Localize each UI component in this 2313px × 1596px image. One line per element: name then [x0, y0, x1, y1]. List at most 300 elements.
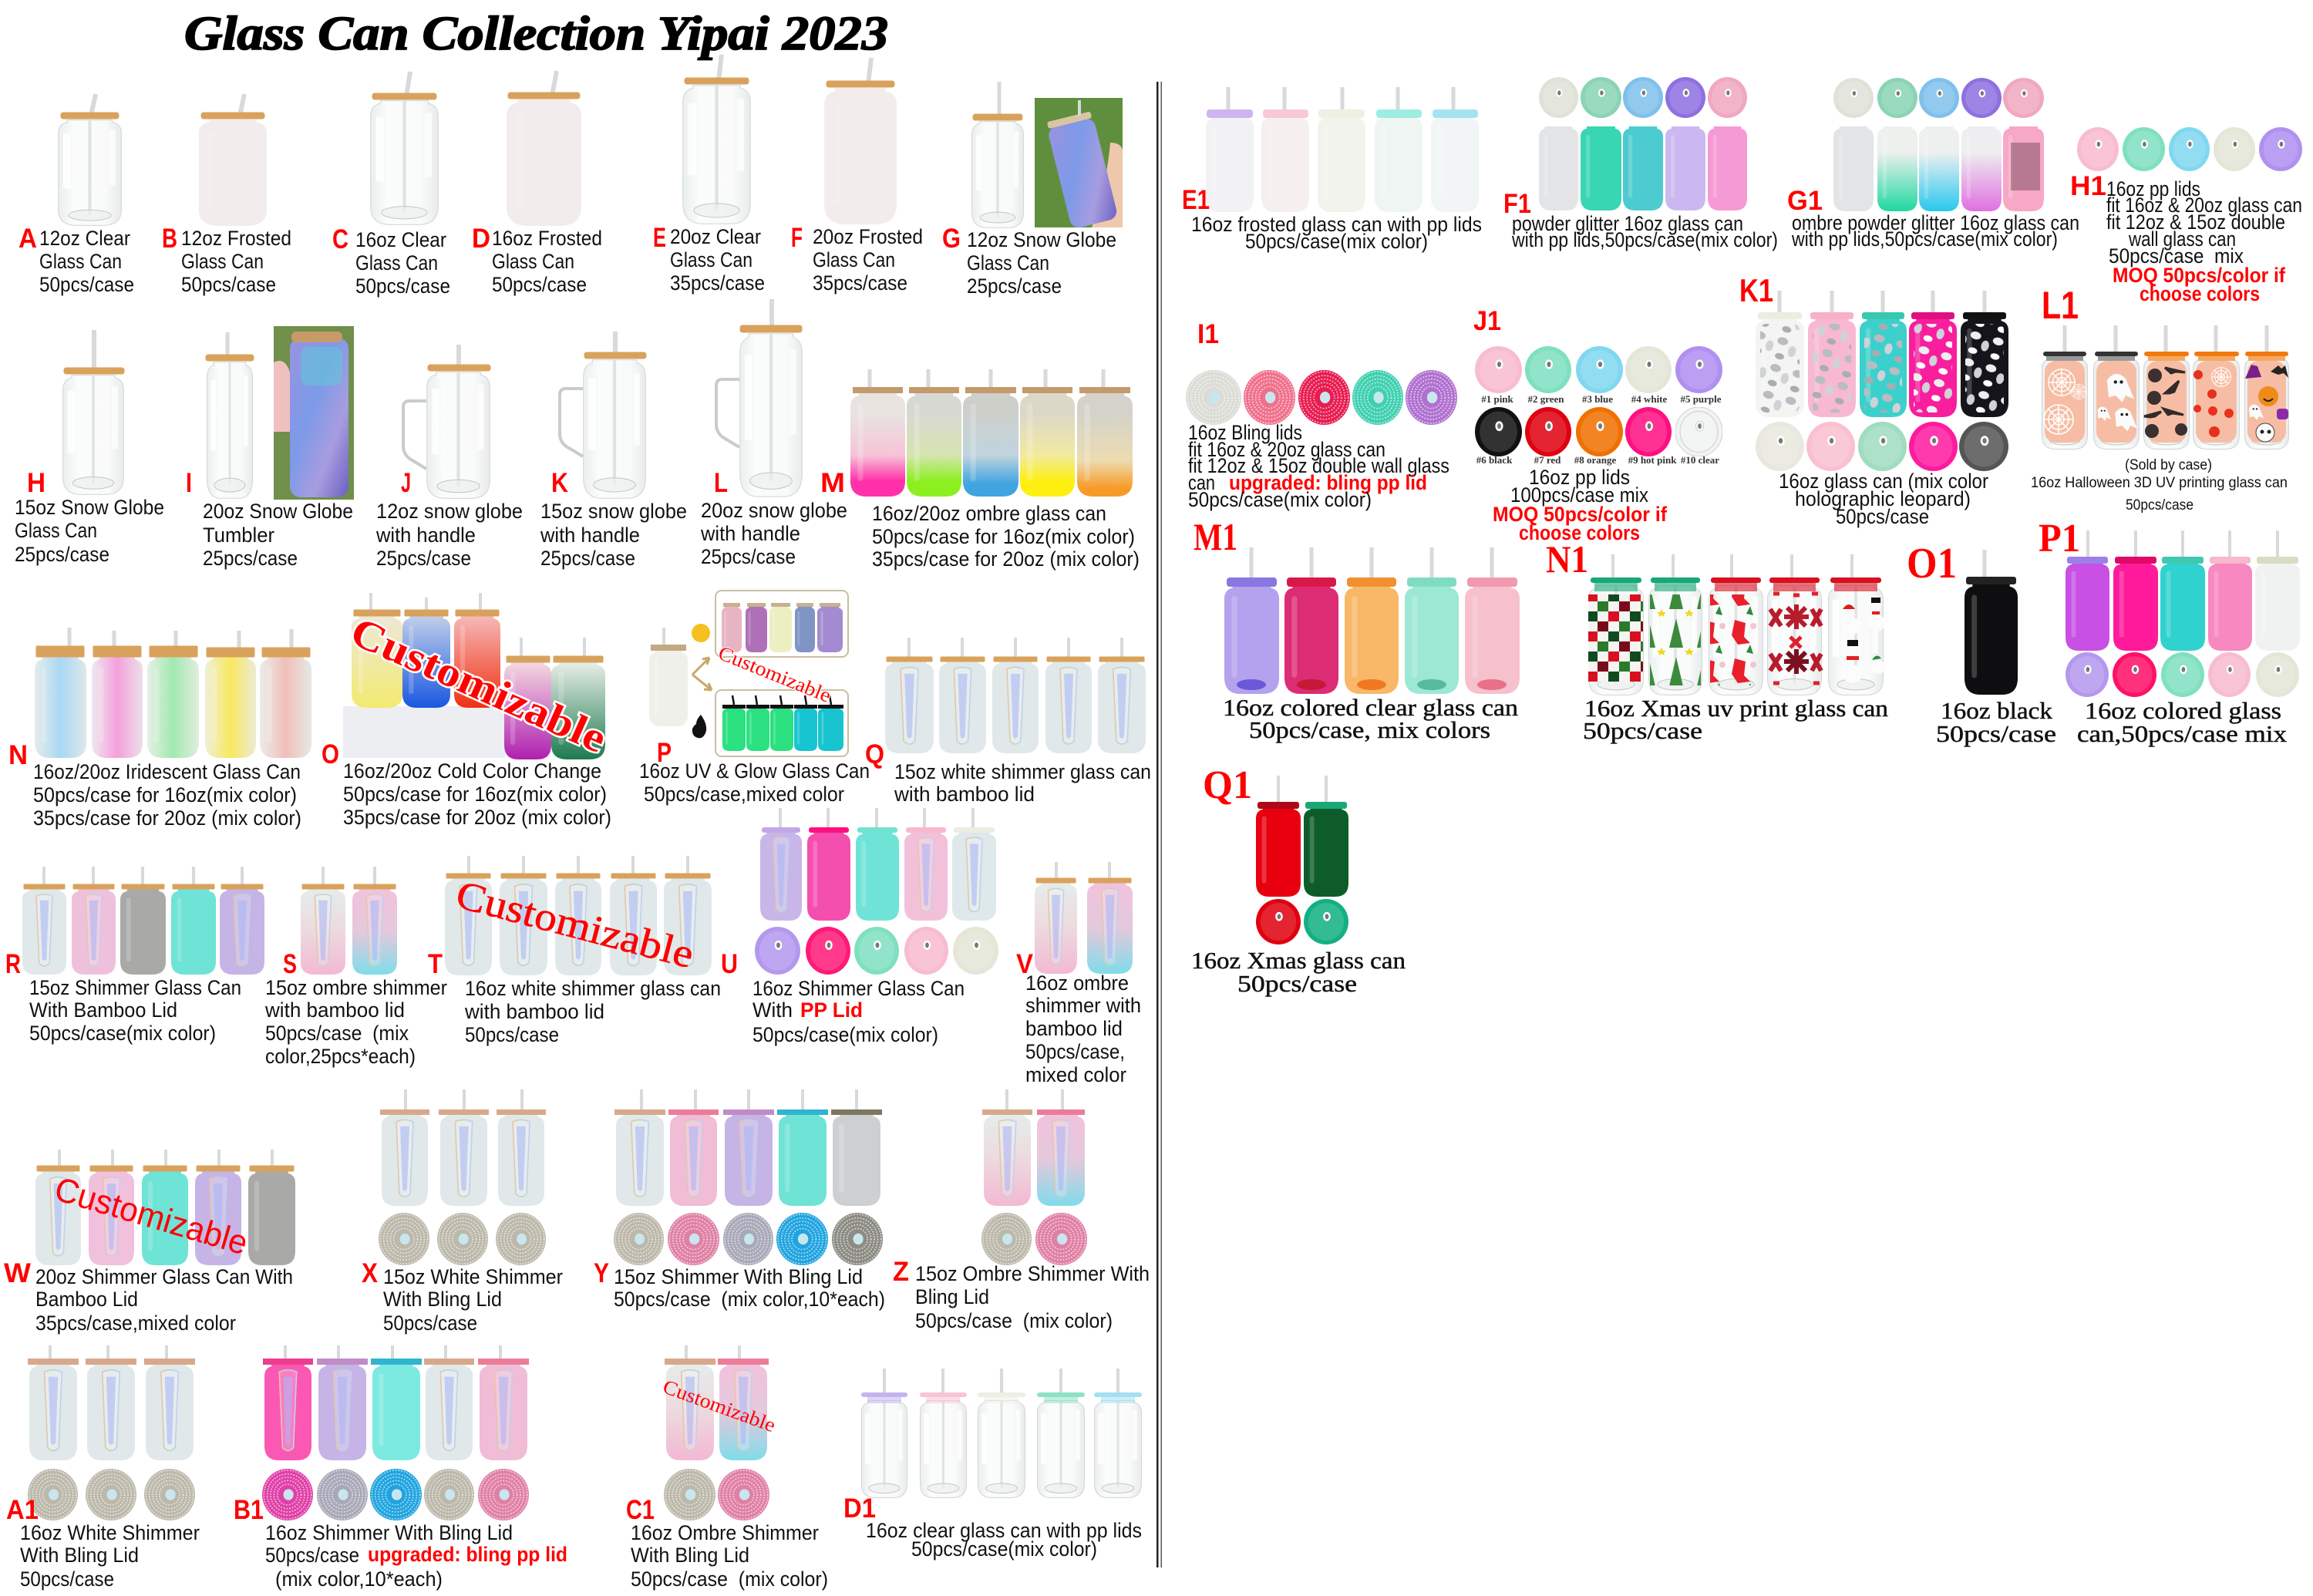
caption D1: 16oz clear glass can with pp lids: [866, 1519, 1142, 1542]
Customizable watermark: Customizable: [452, 873, 699, 977]
caption L1: 50pcs/case: [2126, 497, 2193, 513]
caption J: 25pcs/case: [376, 547, 471, 570]
Customizable watermark: Customizable: [50, 1170, 252, 1262]
panel: P UV and glow: [639, 591, 870, 806]
icon: pp lids row two: [1475, 407, 1722, 456]
Customizable watermark: Customizable: [344, 608, 614, 762]
caption H1: choose colors: [2140, 282, 2260, 305]
icon: two ombre shimmer cans: [301, 867, 397, 975]
icon: three bling lids: [28, 1469, 195, 1520]
photo: color change cans on stand: [343, 593, 605, 759]
panel: G 12oz snow globe: [942, 82, 1123, 298]
letter K: K: [551, 468, 568, 498]
caption T: with bamboo lid: [464, 1000, 604, 1023]
caption G: 25pcs/case: [967, 274, 1062, 298]
caption N: 35pcs/case for 20oz (mix color): [33, 806, 301, 830]
caption B1: 50pcs/case: [265, 1544, 359, 1567]
caption X: [383, 1265, 563, 1335]
caption S: 15oz ombre shimmer: [265, 976, 447, 999]
caption L: 25pcs/case: [701, 545, 796, 568]
icon: three shimmer cans: [380, 1089, 546, 1206]
caption W: [35, 1265, 293, 1335]
letter Q1: Q1: [1203, 763, 1252, 807]
caption S: 50pcs/case (mix: [265, 1022, 409, 1045]
panel: Q white shimmer: [865, 638, 1151, 806]
caption E: [670, 225, 765, 295]
caption B: 50pcs/case: [181, 273, 276, 296]
letter N1: N1: [1546, 537, 1588, 581]
caption J: with handle: [375, 524, 476, 547]
letter N: N: [8, 740, 28, 770]
lid colour names row one: #3 blue: [1582, 393, 1613, 405]
panel: D 16oz frosted: [472, 71, 602, 296]
caption U: 50pcs/case(mix color): [752, 1023, 938, 1046]
panel: J 12oz snow globe handle: [375, 345, 523, 570]
letter C1: C1: [626, 1495, 655, 1525]
caption T: 50pcs/case: [465, 1023, 559, 1046]
caption C1: 16oz Ombre Shimmer: [631, 1521, 819, 1544]
caption Q: [894, 760, 1151, 806]
icon: five lids: [1833, 78, 2044, 118]
caption A1: 16oz White Shimmer: [20, 1521, 200, 1544]
letter W: W: [4, 1258, 31, 1288]
icon: five coloured clear cans: [1224, 547, 1520, 694]
caption A1: 50pcs/case: [20, 1567, 114, 1591]
caption F: 35pcs/case: [813, 271, 907, 295]
caption B1: upgraded: bling pp lid: [368, 1543, 567, 1566]
panel: N iridescent: [8, 628, 311, 830]
caption R: 15oz Shimmer Glass Can: [29, 976, 241, 999]
panel: A 12oz clear: [19, 94, 134, 296]
panel: U shimmer with PP lid: [721, 808, 998, 1046]
caption W: Bamboo Lid: [35, 1288, 138, 1311]
caption B: Glass Can: [181, 250, 264, 273]
caption E: 35pcs/case: [670, 271, 765, 295]
caption C1: [631, 1521, 828, 1591]
icon: snow globe can: [972, 82, 1023, 227]
icon: five shimmer cans: [263, 1345, 529, 1460]
letter Y: Y: [594, 1258, 609, 1288]
caption N: [33, 760, 301, 830]
caption Q: 15oz white shimmer glass can: [894, 760, 1151, 783]
letter F: F: [791, 223, 803, 253]
icon: three shimmer cans: [28, 1345, 195, 1460]
lid colour names row two: #9 hot pink: [1628, 454, 1677, 466]
icon: two ombre cans: [982, 1089, 1085, 1206]
caption H: 25pcs/case: [15, 543, 109, 566]
caption Y: 50pcs/case (mix color,10*each): [614, 1288, 885, 1311]
letter G: G: [942, 224, 961, 254]
letter H: H: [27, 468, 45, 498]
caption C1: 50pcs/case (mix color): [631, 1567, 828, 1591]
caption A1: With Bling Lid: [20, 1544, 139, 1567]
caption O: 35pcs/case for 20oz (mix color): [343, 806, 611, 829]
letter U: U: [721, 949, 738, 979]
panel: O cold color change: [322, 593, 614, 829]
arrows to UV and glow: [692, 658, 712, 690]
panel: I 20oz snow globe tumbler: [186, 326, 354, 570]
caption I1: 16oz Bling lids: [1188, 421, 1302, 444]
Customizable watermark: Customizable: [660, 1375, 779, 1436]
letter F1: F1: [1503, 189, 1531, 219]
panel: UV colors: [715, 591, 848, 657]
letter M: M: [820, 468, 845, 498]
caption H: [15, 496, 164, 566]
caption S: [264, 976, 447, 1068]
icon: can with handle: [403, 345, 490, 498]
letter P1: P1: [2039, 517, 2080, 561]
lid colour names row two: #7 red: [1534, 454, 1561, 466]
panel: Z 15oz ombre bling: [893, 1089, 1150, 1332]
printed webs: [2044, 368, 2231, 434]
caption C: 16oz Clear: [355, 228, 446, 251]
panel: P1 colored cans: [2039, 517, 2300, 747]
panel: G1 ombre powder glitter: [1787, 78, 2079, 251]
icon: five lids: [1756, 422, 2008, 471]
lid colour names row two: #10 clear: [1681, 454, 1719, 466]
caption V: mixed color: [1025, 1063, 1126, 1086]
caption Q: with bamboo lid: [894, 783, 1035, 806]
icon: five pp lids: [2077, 127, 2302, 171]
caption J1: MOQ 50pcs/color if: [1493, 503, 1668, 526]
caption D1: [866, 1519, 1142, 1561]
panel: W 20oz shimmer: [4, 1150, 295, 1335]
icon: five PP lids: [755, 927, 998, 975]
divider between columns: [1156, 82, 1162, 1567]
caption Q1: 16oz Xmas glass can: [1191, 947, 1406, 974]
caption Q1: 50pcs/case: [1237, 970, 1357, 997]
printed nordic stars: [1770, 594, 1821, 683]
panel: H 15oz snow globe: [15, 330, 164, 566]
panel: M ombre cans: [820, 369, 1140, 571]
caption E1: [1191, 213, 1482, 253]
icon: five bling lids: [262, 1469, 529, 1520]
caption X: 15oz White Shimmer: [383, 1265, 563, 1288]
caption N1: 16oz Xmas uv print glass can: [1584, 695, 1889, 722]
caption M1: 16oz colored clear glass can: [1223, 694, 1519, 721]
caption G1: [1791, 211, 2079, 251]
caption X: With Bling Lid: [383, 1288, 502, 1311]
letter M1: M1: [1194, 515, 1237, 558]
panel: L1 halloween cans: [2031, 284, 2289, 513]
caption M: 50pcs/case for 16oz(mix color): [872, 525, 1135, 548]
letter S: S: [283, 949, 297, 979]
letter O: O: [322, 739, 339, 769]
icon: two bling lids: [664, 1469, 769, 1520]
icon: five clear cans: [861, 1369, 1142, 1497]
icon: frosted can: [507, 71, 581, 226]
caption Z: 15oz Ombre Shimmer With: [915, 1262, 1150, 1285]
caption E1: 50pcs/case(mix color): [1245, 230, 1428, 253]
panel: I1 bling lids: [1186, 319, 1457, 511]
letter J: J: [401, 468, 411, 498]
panel: B1 16oz shimmer bling: [234, 1345, 567, 1591]
letter V: V: [1016, 949, 1034, 979]
caption K1: holographic leopard): [1795, 487, 1971, 510]
panel: C 16oz clear: [332, 72, 450, 298]
caption D: 50pcs/case: [492, 273, 587, 296]
caption L1: [2031, 457, 2288, 513]
icon: five lids: [2066, 652, 2299, 697]
caption I1: fit 16oz & 20oz glass can: [1188, 438, 1385, 461]
icon: two lids: [1256, 899, 1348, 944]
lid colour names row one: #5 purple: [1680, 393, 1722, 405]
letter I: I: [186, 468, 192, 498]
icon: clear tumbler: [207, 332, 253, 498]
panel: E 20oz clear: [653, 55, 765, 295]
caption F: Glass Can: [813, 248, 895, 271]
letter K1: K1: [1739, 272, 1773, 308]
caption A: Glass Can: [39, 250, 122, 273]
icon: two xmas cans: [1256, 776, 1348, 897]
letter O1: O1: [1907, 540, 1957, 588]
panel: S ombre shimmer: [264, 867, 447, 1068]
caption Z: 50pcs/case (mix color): [915, 1309, 1113, 1332]
icon: five lids: [1539, 77, 1747, 118]
caption Q1: [1191, 947, 1406, 997]
caption G: Glass Can: [967, 251, 1049, 274]
icon: can bases with peach fill and lids: [2042, 325, 2289, 449]
caption Z: [915, 1262, 1150, 1332]
icon: black can: [1965, 550, 2018, 695]
caption Y: 15oz Shimmer With Bling Lid: [614, 1265, 863, 1288]
caption I1: fit 12oz & 15oz double wall glass: [1188, 454, 1449, 477]
title: Glass Can Collection Yipai 2023: [184, 8, 888, 60]
caption U: PP Lid: [800, 998, 863, 1022]
caption N: 50pcs/case for 16oz(mix color): [33, 783, 297, 806]
caption T: 16oz white shimmer glass can: [465, 977, 721, 1000]
caption D: [492, 227, 602, 296]
caption W: 35pcs/case,mixed color: [35, 1311, 236, 1335]
caption P: [639, 759, 870, 806]
icon: five bling lids: [614, 1213, 883, 1265]
caption F: [813, 225, 923, 295]
caption N: 16oz/20oz Iridescent Glass Can: [33, 760, 301, 783]
caption R: 50pcs/case(mix color): [29, 1022, 216, 1045]
icon: five frosted cans: [1206, 87, 1479, 212]
icon: two bling lids: [981, 1213, 1087, 1265]
letter D: D: [472, 224, 490, 254]
caption J1: 16oz pp lids: [1529, 466, 1630, 489]
letter P: P: [657, 738, 672, 768]
letter L: L: [714, 468, 728, 498]
caption H: Glass Can: [15, 519, 97, 542]
letter H1: H1: [2070, 171, 2106, 201]
caption G1: ombre powder glitter 16oz glass can: [1792, 211, 2079, 234]
printed snowmen: [1843, 598, 1885, 683]
letter R: R: [5, 949, 21, 979]
caption A: [39, 227, 134, 296]
letter B1: B1: [234, 1495, 264, 1525]
panel: glow colors: [715, 690, 848, 756]
caption U: [752, 977, 965, 1046]
icon: can with handle: [716, 299, 802, 497]
caption H: 15oz Snow Globe: [15, 496, 164, 519]
icon: five coloured cans: [2066, 530, 2300, 651]
panel: E1 frosted with pp lids: [1182, 87, 1482, 253]
caption Y: [614, 1265, 885, 1311]
caption F1: with pp lids,50pcs/case(mix color): [1511, 228, 1778, 251]
caption K1: 16oz glass can (mix color: [1779, 470, 1988, 493]
caption B1: [265, 1521, 567, 1591]
caption D1: 50pcs/case(mix color): [911, 1537, 1097, 1561]
panel: M1 colored clear: [1194, 515, 1520, 743]
caption O: [343, 759, 611, 829]
caption K1: [1779, 470, 1988, 528]
icon: frosted can: [199, 94, 267, 226]
caption L: [700, 499, 847, 568]
caption Z: Bling Lid: [915, 1285, 989, 1308]
letter I1: I1: [1197, 319, 1219, 349]
caption G: 12oz Snow Globe: [967, 228, 1116, 251]
letter L1: L1: [2042, 284, 2079, 327]
caption L: with handle: [700, 522, 800, 545]
caption T: [464, 977, 721, 1046]
caption J1: 100pcs/case mix: [1510, 483, 1648, 507]
caption H1: MOQ 50pcs/color if: [2113, 264, 2286, 287]
caption B1: 16oz Shimmer With Bling Lid: [265, 1521, 513, 1544]
caption J: 12oz snow globe: [376, 500, 523, 523]
lid colour names row one: #1 pink: [1481, 393, 1514, 405]
letter Z: Z: [893, 1257, 909, 1287]
caption V: bamboo lid: [1025, 1017, 1123, 1040]
icon: five glitter cans: [1539, 126, 1747, 210]
panel: L 20oz snow globe handle: [700, 299, 847, 568]
caption O1: 50pcs/case: [1936, 720, 2056, 747]
caption R: With Bamboo Lid: [29, 998, 177, 1022]
caption X: 50pcs/case: [383, 1311, 477, 1335]
caption E: 20oz Clear: [670, 225, 761, 248]
caption P: 50pcs/case,mixed color: [644, 783, 844, 806]
icon: five shimmer cans: [35, 1150, 295, 1265]
caption M: 35pcs/case for 20oz (mix color): [872, 547, 1140, 571]
caption I1: upgraded: bling pp lid: [1229, 471, 1427, 494]
panel: Q1 xmas glass can: [1191, 763, 1406, 997]
panel: X 15oz white bling: [362, 1089, 563, 1335]
icon: two ombre cans: [665, 1345, 769, 1460]
panel: H1 pp lids: [2070, 127, 2302, 305]
icon: three bling lids: [379, 1213, 546, 1265]
caption F1: [1511, 212, 1778, 251]
caption O1: [1936, 697, 2056, 747]
icon: five ombre cans: [1833, 126, 2044, 211]
caption H1: wall glass can: [2128, 227, 2236, 251]
caption J1: choose colors: [1519, 521, 1640, 544]
caption E1: 16oz frosted glass can with pp lids: [1191, 213, 1482, 236]
caption O: 16oz/20oz Cold Color Change: [343, 759, 601, 783]
letter A: A: [19, 224, 37, 254]
panel: R shimmer: [5, 867, 264, 1045]
icon: five shimmer cans: [885, 638, 1146, 753]
icon: five shimmer cans: [760, 808, 996, 921]
caption V: shimmer with: [1025, 994, 1141, 1017]
icon: frosted can: [824, 58, 897, 224]
icon: five iridescent cans: [35, 628, 311, 758]
caption H1: [2106, 177, 2302, 305]
caption V: [1025, 971, 1141, 1086]
lid colour names row one: #4 white: [1631, 393, 1668, 405]
letter B: B: [162, 224, 177, 254]
caption B: [181, 227, 291, 296]
caption I: Tumbler: [203, 524, 274, 547]
letter J1: J1: [1473, 306, 1501, 336]
caption A: 50pcs/case: [39, 273, 134, 296]
caption C: 50pcs/case: [355, 274, 450, 298]
caption A1: [20, 1521, 200, 1591]
panel: Y 15oz shimmer bling: [594, 1089, 885, 1311]
caption I1: can: [1188, 471, 1215, 494]
caption P: 16oz UV & Glow Glass Can: [639, 759, 870, 783]
icon: frosted base can: [649, 628, 688, 726]
caption K: 25pcs/case: [540, 547, 635, 570]
caption G: [967, 228, 1116, 298]
printed ghosts: [2097, 374, 2264, 431]
caption I: [203, 500, 353, 570]
printed pumpkins and bats: [2144, 368, 2234, 438]
panel: J1 pp lid colours: [1473, 306, 1722, 544]
caption J: [375, 500, 523, 570]
caption H1: 50pcs/case mix: [2109, 244, 2244, 268]
caption G1: with pp lids,50pcs/case(mix color): [1791, 227, 2058, 251]
caption M1: 50pcs/case, mix colors: [1249, 716, 1490, 743]
caption L: 20oz snow globe: [701, 499, 847, 522]
lid colour names row two: [1476, 454, 1719, 466]
caption N1: 50pcs/case: [1583, 717, 1702, 744]
lid colour names row one: #2 green: [1527, 393, 1564, 405]
caption E: Glass Can: [670, 248, 752, 271]
caption K1: 50pcs/case: [1836, 505, 1929, 528]
caption P1: 16oz colored glass: [2085, 697, 2281, 724]
panel: T white shimmer customizable: [428, 856, 721, 1046]
caption I: 20oz Snow Globe: [203, 500, 353, 523]
panel: D1 clear with pp lids: [843, 1369, 1142, 1561]
caption C1: With Bling Lid: [631, 1544, 749, 1567]
icon: flame: [692, 715, 706, 738]
icon: five leopard cans: [1756, 291, 2008, 417]
panel: A1 16oz white bling: [6, 1345, 200, 1591]
caption W: 20oz Shimmer Glass Can With: [35, 1265, 293, 1288]
caption C: Glass Can: [355, 251, 438, 274]
caption B: 12oz Frosted: [181, 227, 291, 250]
icon: five shimmer cans: [614, 1089, 882, 1206]
icon: clear can: [63, 330, 123, 494]
caption O: 50pcs/case for 16oz(mix color): [343, 783, 607, 806]
letter E1: E1: [1182, 185, 1210, 215]
panel: V ombre shimmer: [1016, 862, 1141, 1086]
letter C: C: [332, 224, 348, 254]
caption L1: 16oz Halloween 3D UV printing glass can: [2031, 475, 2288, 491]
caption U: With: [752, 998, 793, 1022]
letter A1: A1: [6, 1495, 39, 1525]
caption M: [872, 502, 1140, 571]
icon: clear can: [683, 55, 750, 224]
caption S: color,25pcs*each): [265, 1045, 416, 1068]
icon: five bling lids: [1186, 370, 1457, 425]
letter D1: D1: [843, 1493, 876, 1524]
lid colour names row two: #6 black: [1476, 454, 1513, 466]
caption F1: powder glitter 16oz glass can: [1512, 212, 1743, 235]
panel: C1 16oz ombre bling: [626, 1345, 828, 1591]
caption S: with bamboo lid: [264, 998, 405, 1022]
icon: clear can: [371, 72, 438, 224]
letter G1: G1: [1787, 186, 1823, 216]
panel: N1 xmas print: [1546, 537, 1889, 744]
Customizable watermark: Customizable: [715, 641, 834, 707]
caption H1: fit 12oz & 15oz double: [2106, 210, 2285, 234]
caption D: 16oz Frosted: [492, 227, 602, 250]
icon: two ombre shimmer cans: [1035, 862, 1133, 974]
icon: can with handle: [560, 332, 645, 498]
